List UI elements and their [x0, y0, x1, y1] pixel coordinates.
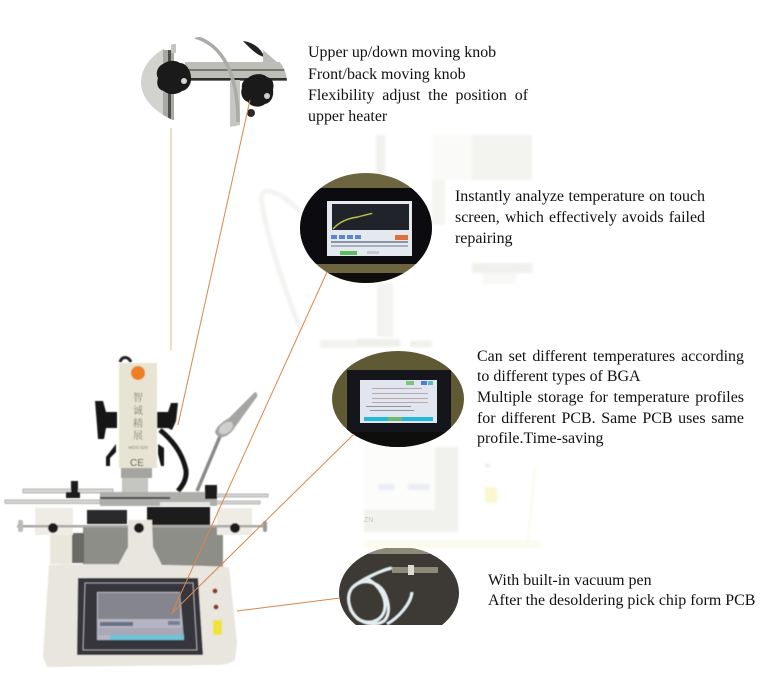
- photo: temperature settings screen: [330, 349, 466, 449]
- text block: touch screen: screen, which effectively avoids failed: [455, 209, 705, 226]
- machine: heater head: 展: [133, 427, 143, 442]
- text block: temperature profiles: Multiple storage for temperature profiles: [477, 389, 744, 406]
- machine: hose: [160, 430, 186, 491]
- text block: moving knob: Flexibility adjust the position of: [308, 87, 528, 104]
- machine: heater neck: [121, 468, 152, 494]
- machine: heater head: WDS-520: [128, 445, 148, 450]
- leader lines: [171, 100, 354, 614]
- machine: heater head: 诚: [133, 402, 143, 417]
- machine: heater head: 精: [133, 415, 143, 430]
- text block: moving knob: Front/back moving knob: [308, 66, 466, 83]
- text block: temperature profiles: Can set different temperatures according: [477, 348, 744, 365]
- text block: touch screen: [455, 188, 705, 247]
- machine: rear body: [83, 526, 223, 567]
- machine: heater head: [119, 363, 157, 469]
- text block: temperature profiles: profile.Time-saving: [477, 430, 603, 447]
- machine: base: [43, 564, 237, 667]
- text block: moving knob: Upper up/down moving knob: [308, 44, 496, 61]
- text block: touch screen: Instantly analyze temperature on touch: [455, 188, 705, 205]
- photo: moving knobs: [140, 35, 290, 130]
- machine: PCB rails: [5, 489, 268, 504]
- machine: lamp arm: [197, 392, 257, 491]
- text block: vacuum pen: With built-in vacuum pen: [488, 572, 652, 589]
- machine: PCB supports: [87, 507, 210, 527]
- machine: rail knobs: [66, 481, 217, 499]
- text block: touch screen: repairing: [455, 230, 513, 247]
- product illustration: [4, 36, 540, 668]
- text block: temperature profiles: to different types of BGA: [477, 368, 640, 385]
- text block: temperature profiles: for different PCB. Same PCB uses same: [477, 410, 744, 427]
- knob: right: [241, 74, 273, 107]
- machine: touch screen: [77, 578, 203, 655]
- machine: heater head: CE: [130, 458, 144, 469]
- text block: temperature profiles: [477, 348, 744, 447]
- faded label: ZN: [364, 517, 373, 524]
- photo: temperature curve screen: [298, 172, 434, 285]
- text block: vacuum pen: After the desoldering pick chip form PCB: [488, 592, 755, 609]
- text block: moving knob: [308, 44, 528, 125]
- text block: moving knob: upper heater: [308, 108, 387, 125]
- knob: left: [157, 61, 191, 94]
- machine: slider blocks: [17, 508, 267, 535]
- machine: heater knobs: [95, 401, 178, 466]
- machine: heater head: 智: [133, 389, 143, 404]
- photo: vacuum pen: [339, 548, 459, 625]
- machine: indicators: [212, 588, 222, 635]
- machine: center bracket: [117, 520, 163, 567]
- machine: [5, 358, 268, 667]
- text block: vacuum pen: [488, 572, 755, 609]
- faded background machine: [262, 135, 540, 548]
